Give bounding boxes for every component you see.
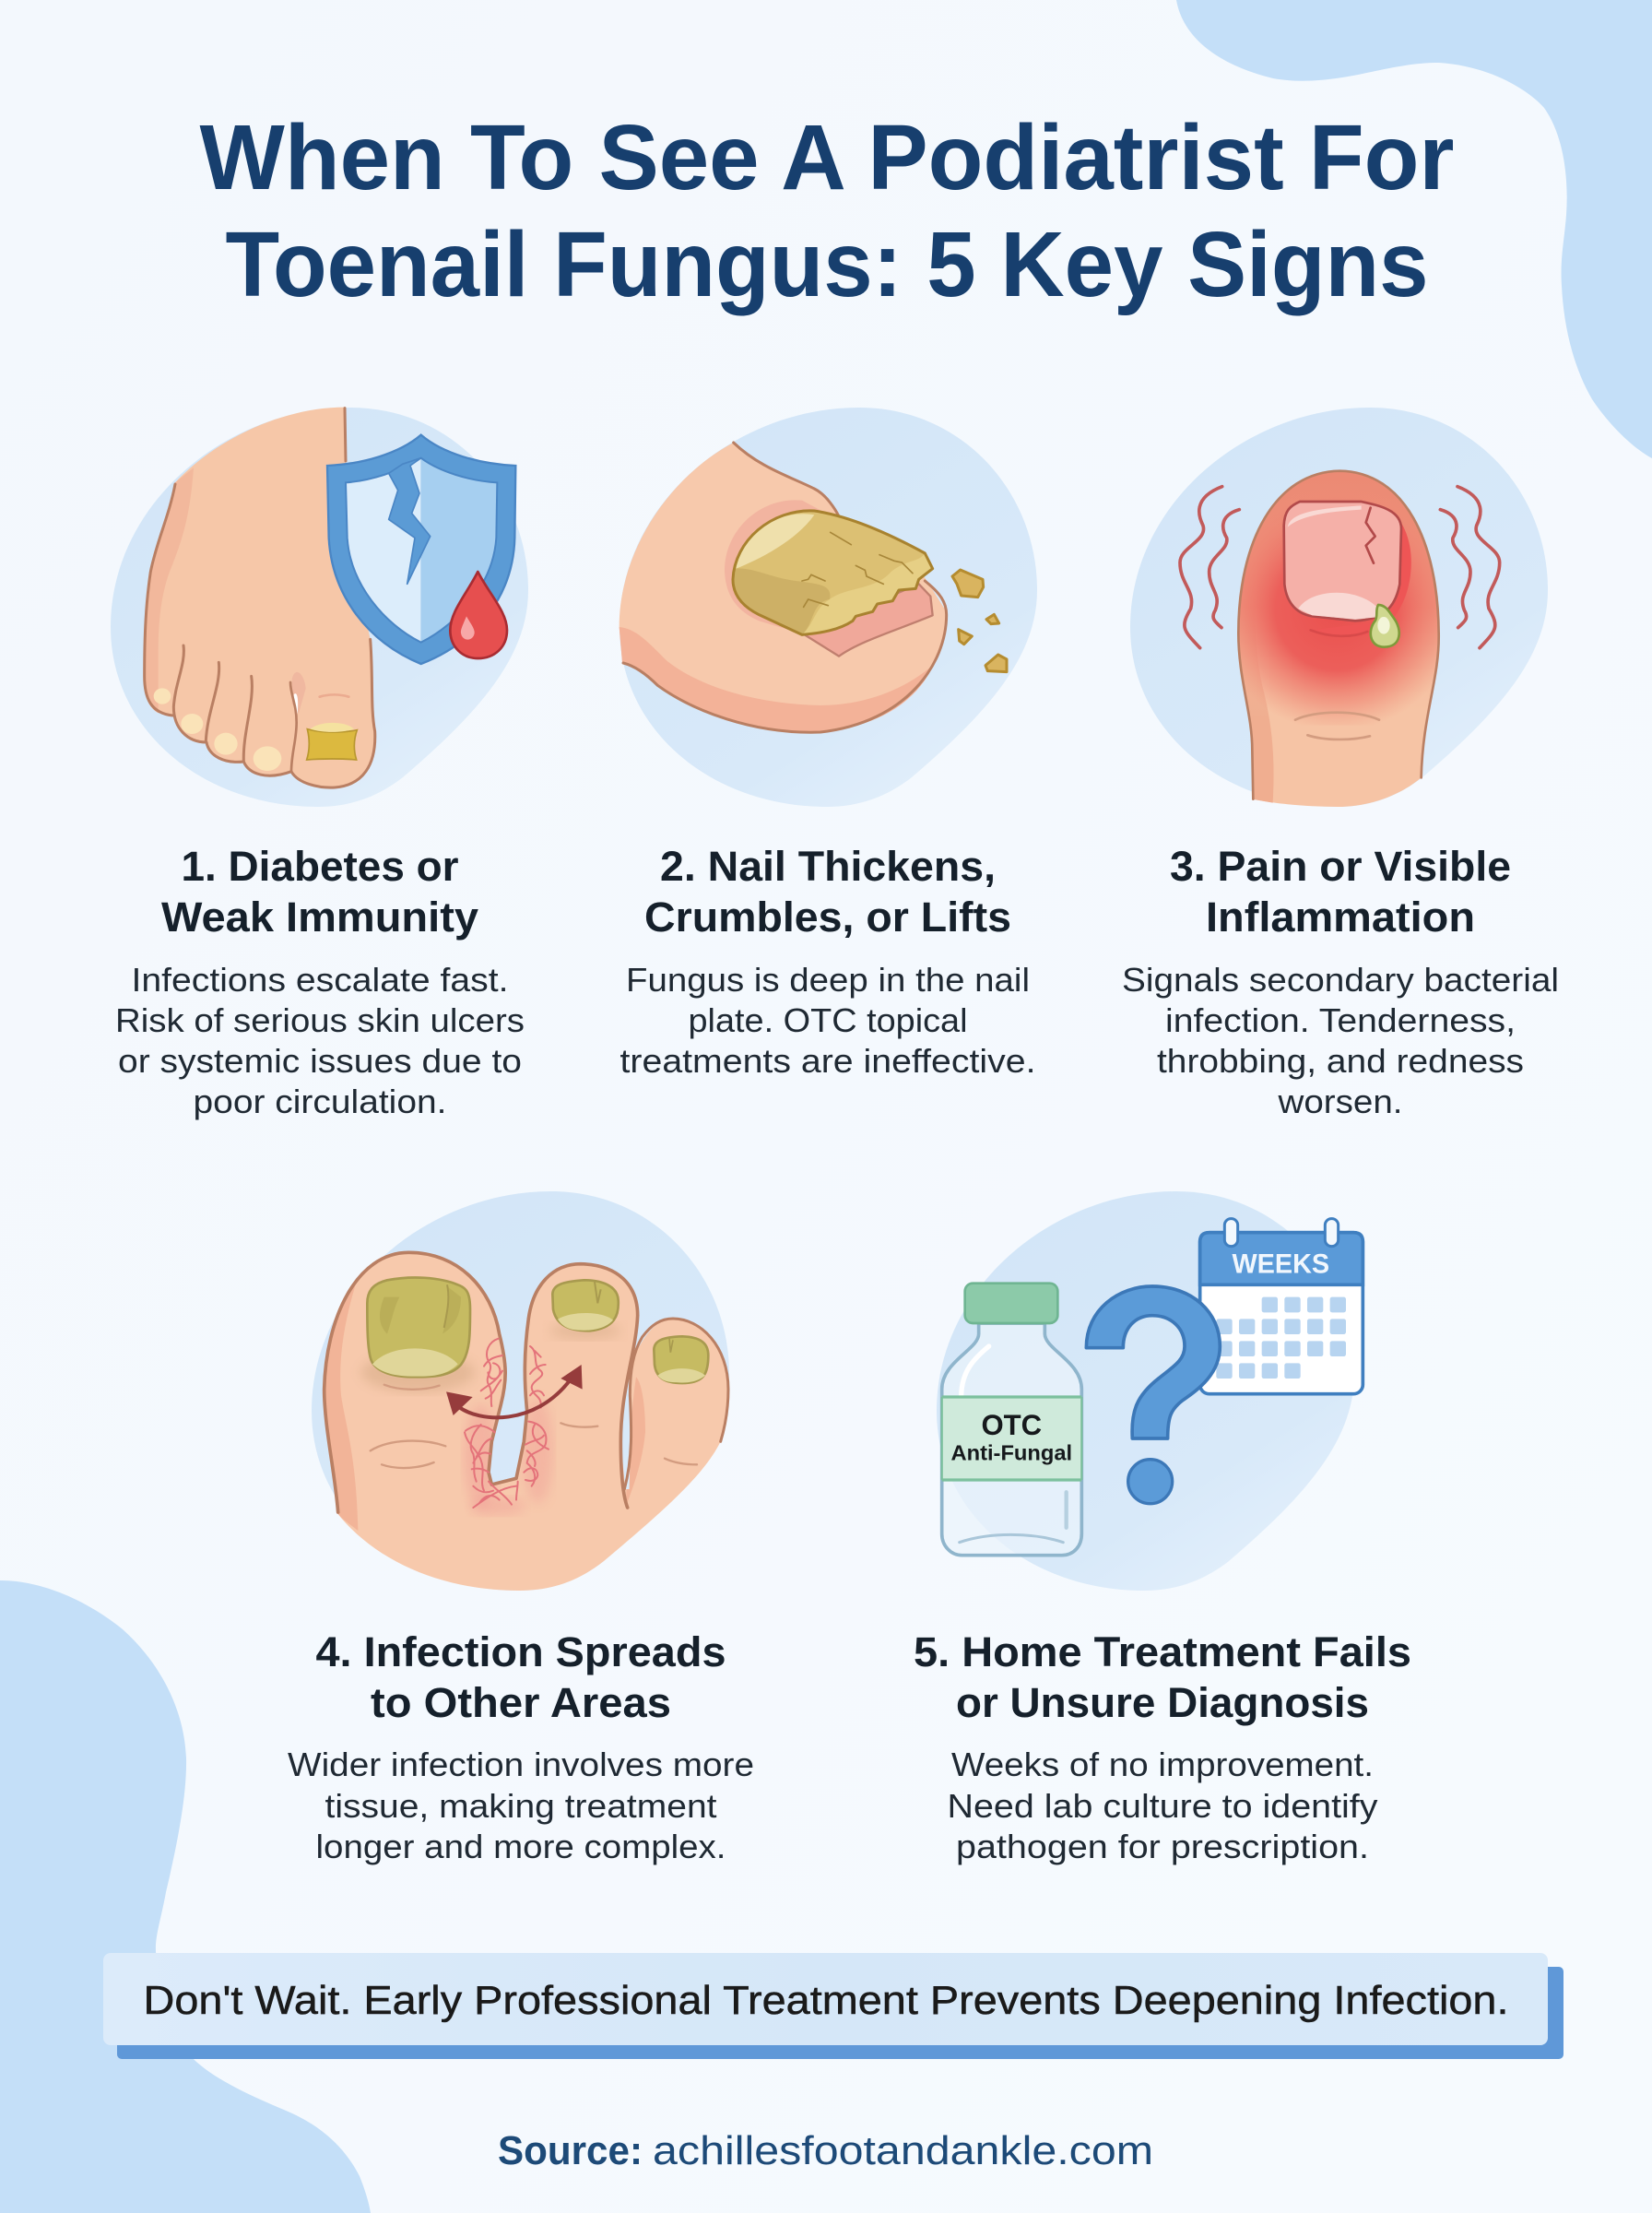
text: sign 3 description: Signals secondary bacterial: [1122, 961, 1559, 999]
text: sign 1 description: Risk of serious skin ulcers: [115, 1001, 525, 1039]
text: sign 4 description: longer and more complex.: [315, 1828, 726, 1865]
heading: sign 4: 4. Infection Spreads: [315, 1628, 726, 1675]
heading: sign 2: 2. Nail Thickens,: [660, 843, 996, 890]
text: sign 1 description: poor circulation.: [194, 1083, 446, 1120]
text: sign 2 description: treatments are ineffective.: [620, 1042, 1036, 1080]
text: sign 3 description: throbbing, and redness: [1157, 1042, 1524, 1080]
text: sign 3 description: worsen.: [1277, 1083, 1403, 1120]
panel: sign 5 home treatment fails: [914, 1191, 1411, 1865]
heading: sign 2: Crumbles, or Lifts: [644, 893, 1011, 941]
text: sign 4 description: tissue, making treatment: [324, 1787, 717, 1825]
panel: sign 1 diabetes: [111, 408, 528, 1120]
panel: sign 4 infection spreads: [288, 1191, 754, 1865]
decorative blob: bottom left: [0, 1580, 371, 2213]
text: sign 3 description: infection. Tenderness,: [1165, 1001, 1516, 1039]
heading: sign 3: 3. Pain or Visible: [1170, 843, 1511, 890]
callout banner: [103, 1953, 1564, 2059]
heading: sign 2: [644, 843, 1011, 941]
text: sign 1 description: [115, 961, 525, 1120]
text: sign 4 description: [288, 1746, 754, 1865]
title: [199, 106, 1455, 316]
heading: sign 1: 1. Diabetes or: [181, 843, 459, 890]
text: sign 1 description: or systemic issues due to: [118, 1042, 522, 1080]
heading: sign 5: 5. Home Treatment Fails: [914, 1628, 1411, 1675]
text: sign 4 description: Wider infection involves more: [288, 1746, 754, 1783]
heading: sign 4: [315, 1628, 726, 1726]
decorative blob: top right: [1176, 0, 1652, 458]
text: sign 5 description: Weeks of no improvement.: [951, 1746, 1374, 1783]
icon: inflamed toe: [1130, 408, 1548, 807]
text: sign 5 description: Need lab culture to identify: [948, 1787, 1377, 1825]
callout banner: Don't Wait. Early Professional Treatment Prevents Deepening Infection.: [144, 1978, 1508, 2023]
icon: OTC bottle, question mark and calendar: WEEKS: [1232, 1249, 1329, 1280]
heading: sign 3: Inflammation: [1206, 893, 1475, 941]
icon: OTC bottle, question mark and calendar: Anti-Fungal: [950, 1440, 1072, 1464]
text: sign 2 description: [620, 961, 1036, 1080]
icon: OTC bottle, question mark and calendar: [937, 1191, 1363, 1591]
heading: sign 3: [1170, 843, 1511, 941]
text: sign 1 description: Infections escalate fast.: [131, 961, 509, 999]
heading: sign 5: or Unsure Diagnosis: [956, 1679, 1369, 1726]
icon: foot with cracked shield and blood drop: [111, 408, 528, 807]
text: sign 2 description: plate. OTC topical: [688, 1001, 968, 1039]
heading: sign 1: Weak Immunity: [161, 893, 478, 941]
source line: achillesfootandankle.com: [653, 2128, 1153, 2173]
title: Toenail Fungus: 5 Key Signs: [225, 213, 1429, 316]
heading: sign 5: [914, 1628, 1411, 1726]
heading: sign 1: [161, 843, 478, 941]
text: sign 5 description: [948, 1746, 1377, 1865]
source line: [498, 2128, 1153, 2173]
icon: OTC bottle, question mark and calendar: OTC: [981, 1409, 1042, 1441]
panel: sign 3 pain: [1122, 408, 1559, 1120]
icon: toes with spreading infection: [312, 1191, 729, 1591]
heading: sign 4: to Other Areas: [371, 1679, 671, 1726]
panel: sign 2 nail thickens: [620, 408, 1037, 1080]
icon: thick crumbling toenail: [620, 408, 1037, 807]
text: sign 3 description: [1122, 961, 1559, 1120]
text: sign 5 description: pathogen for prescription.: [956, 1828, 1369, 1865]
title: When To See A Podiatrist For: [199, 106, 1455, 209]
text: sign 2 description: Fungus is deep in the nail: [626, 961, 1030, 999]
source line: Source:: [498, 2128, 643, 2173]
